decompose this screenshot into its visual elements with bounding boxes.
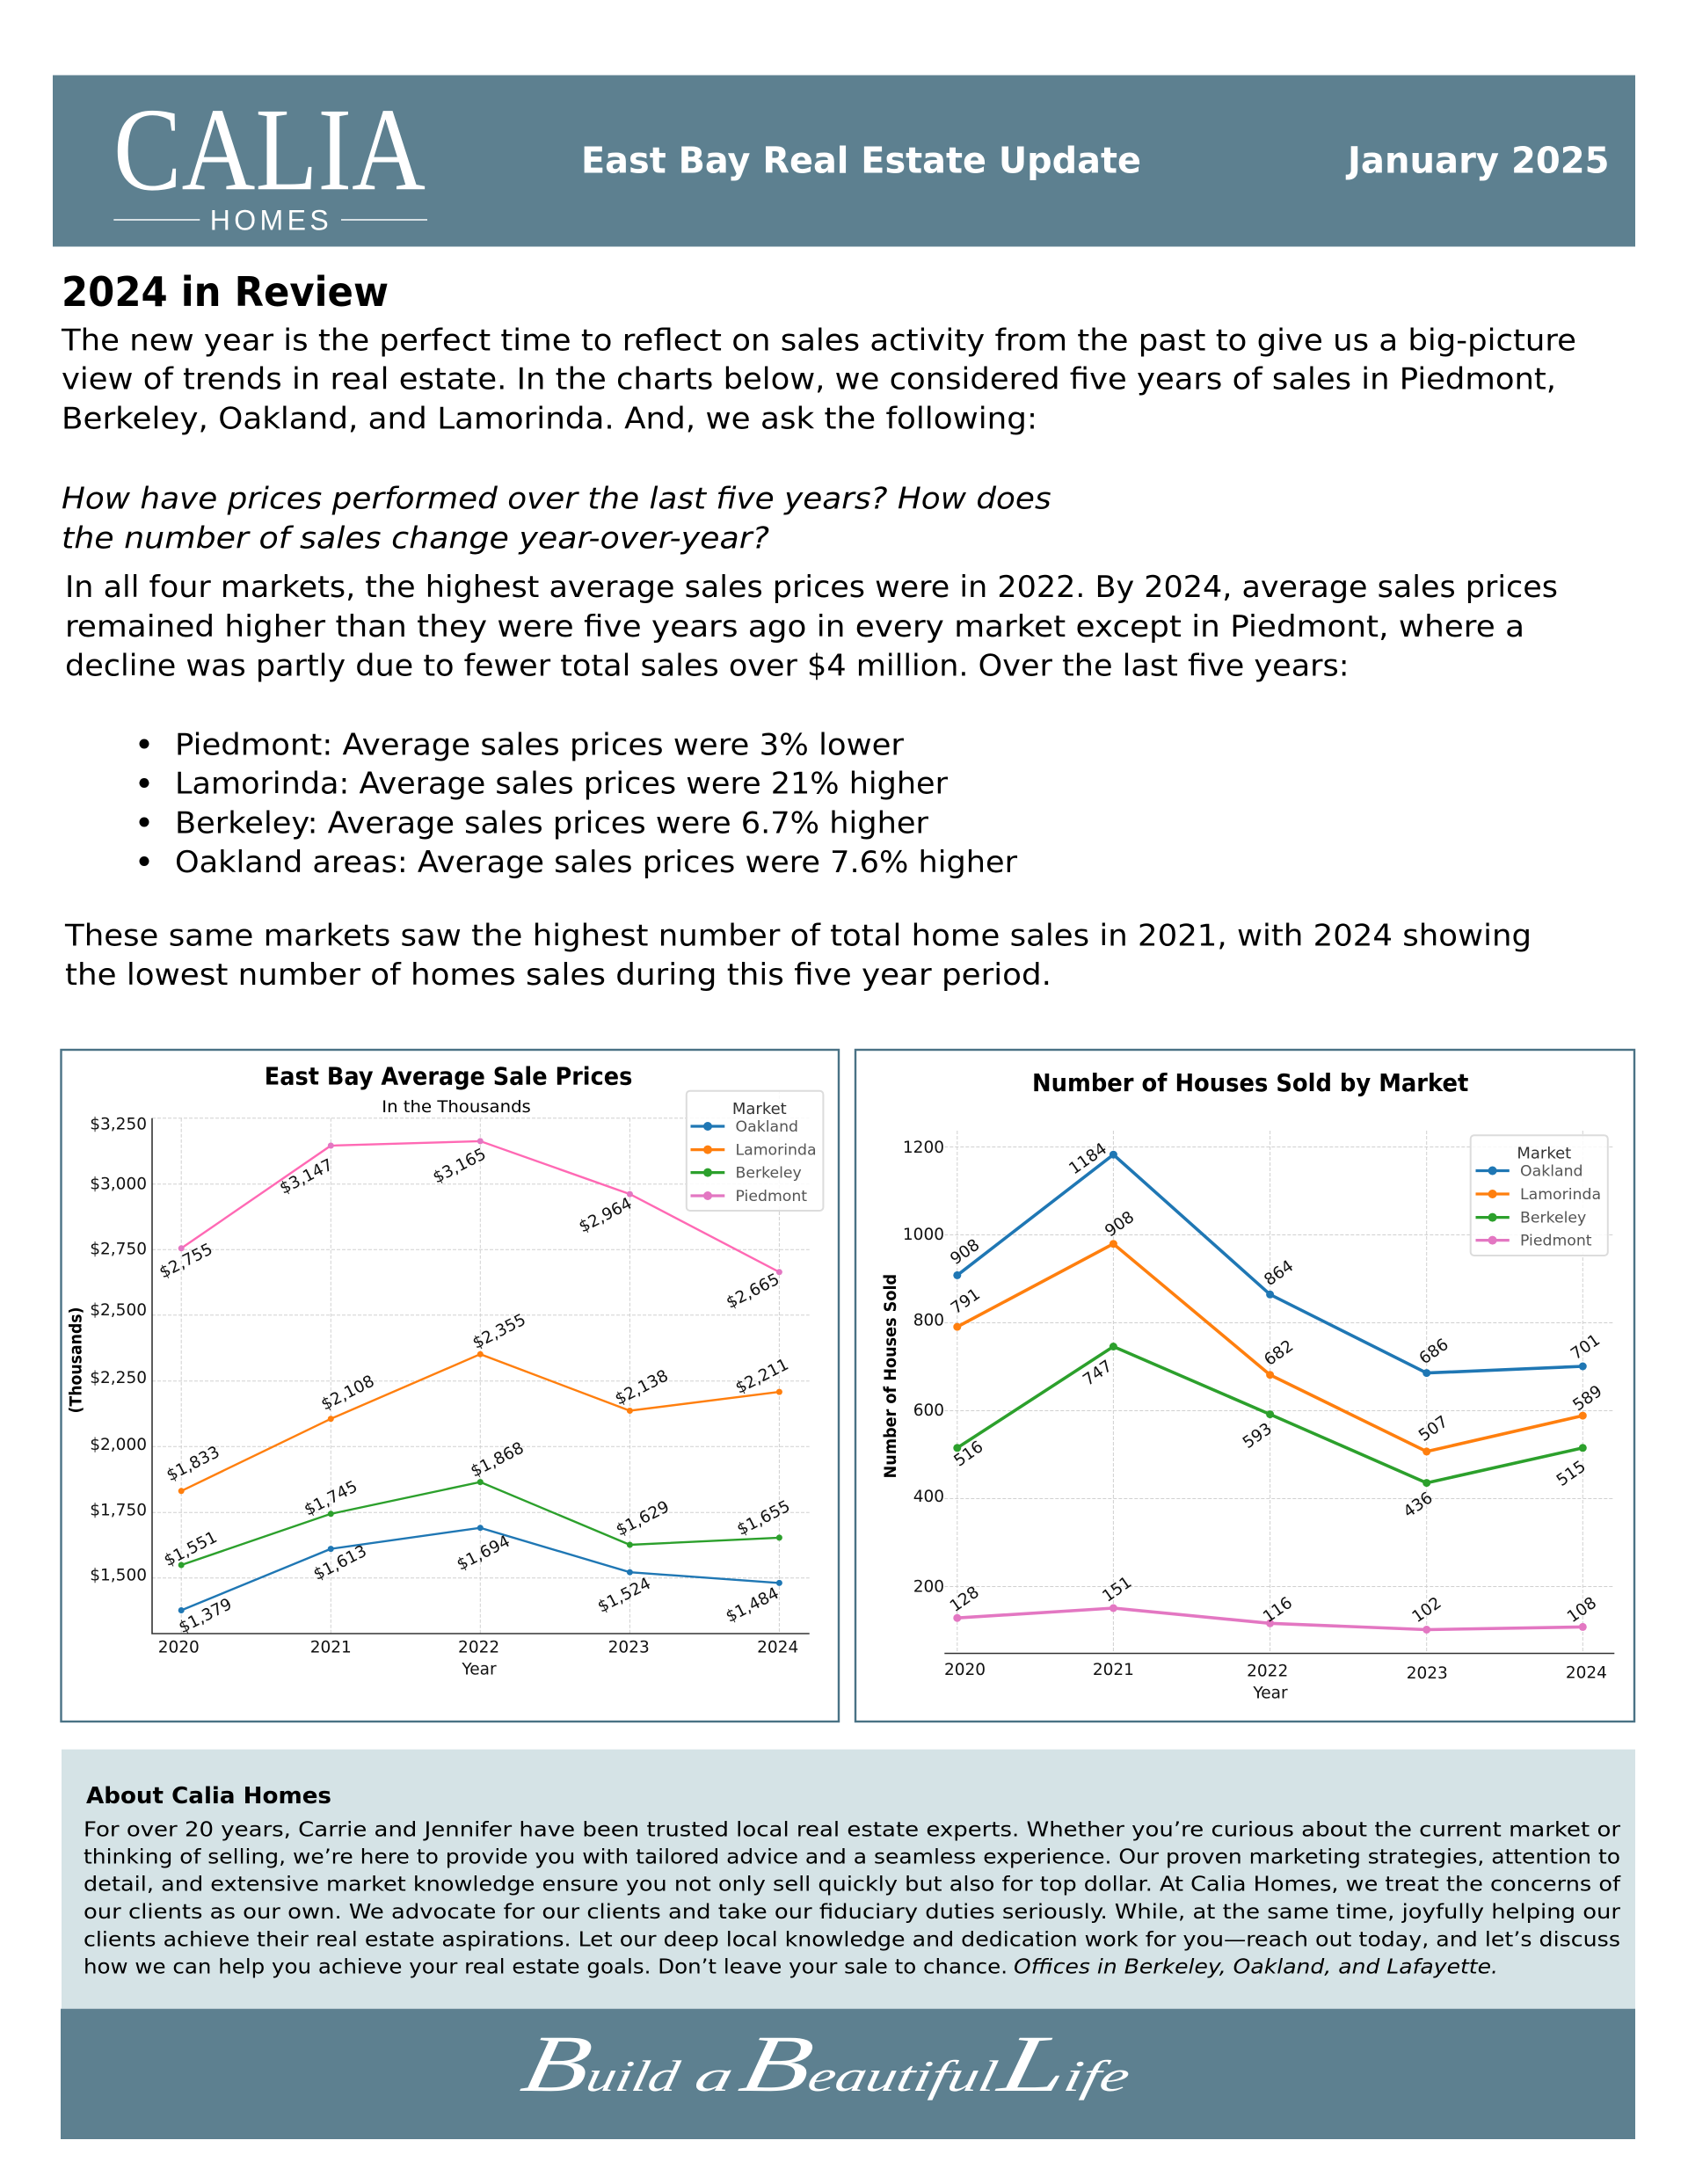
y axis tick labels: 1200 xyxy=(903,1139,944,1157)
banner title: East Bay Real Estate Update xyxy=(581,140,1141,182)
data labels: prices: $1,745 xyxy=(302,1477,360,1519)
x axis tick labels: 2020 xyxy=(944,1661,986,1679)
y axis tick labels xyxy=(90,1115,147,1584)
data labels: prices: $2,211 xyxy=(732,1356,792,1398)
intro paragraph: The new year is the perfect time to reflect on sales activity from the past to give us a big-picture xyxy=(61,323,1576,357)
about body text: Offices in Berkeley, Oakland, and Lafayette. xyxy=(1014,1955,1498,1979)
about body text: detail, and extensive market knowledge ensure you not only sell quickly but also for top dollar. At Calia Homes, we treat the concerns of xyxy=(84,1872,1621,1896)
panel: Number of Houses Sold by Market chart xyxy=(855,1050,1634,1722)
legend: market: Oakland xyxy=(1520,1162,1583,1180)
intro paragraph xyxy=(61,323,1576,435)
x axis tick labels xyxy=(944,1661,1607,1683)
about heading: About Calia Homes xyxy=(86,1783,331,1809)
legend: market: Berkeley xyxy=(735,1165,802,1183)
closing paragraph: the lowest number of homes sales during this five year period. xyxy=(65,957,1051,992)
data labels: prices: $2,355 xyxy=(469,1311,529,1353)
heading: 2024 in Review: 2024 in Review xyxy=(62,268,389,316)
panel: East Bay Average Sale Prices chart xyxy=(62,1050,839,1722)
italic questions xyxy=(62,482,1051,555)
y axis tick labels: 600 xyxy=(913,1401,944,1420)
footer banner xyxy=(61,2009,1635,2139)
about body text: For over 20 years, Carrie and Jennifer have been trusted local real estate experts. Whether you’re curious about the current market or xyxy=(84,1816,1620,1841)
tagline: Build a Beautiful Life: Life xyxy=(990,2020,1141,2109)
x axis tick labels: 2021 xyxy=(1093,1661,1134,1679)
italic questions: How have prices performed over the last five years? How does xyxy=(62,482,1051,516)
header banner xyxy=(53,76,1635,246)
data labels: prices: $2,964 xyxy=(576,1194,635,1236)
data labels: houses sold: 436 xyxy=(1401,1489,1437,1522)
data labels: prices: $1,868 xyxy=(468,1438,527,1481)
about body text xyxy=(84,1816,1621,1979)
x axis title: Year xyxy=(461,1660,497,1679)
y axis tick labels: $2,250 xyxy=(90,1369,147,1387)
data labels: houses sold: 108 xyxy=(1564,1594,1600,1627)
legend: market: Lamorinda xyxy=(735,1142,817,1160)
series: Lamorinda sales xyxy=(953,1240,1587,1455)
legend: market: Piedmont xyxy=(1520,1233,1592,1250)
bullet list: Berkeley: Average sales prices were 6.7% higher xyxy=(175,805,928,840)
y axis tick labels: $3,000 xyxy=(90,1175,147,1194)
bullet list: Lamorinda: Average sales prices were 21% higher xyxy=(175,767,948,801)
x axis tick labels xyxy=(158,1639,798,1656)
data labels: prices: $1,484 xyxy=(723,1584,782,1627)
data labels: houses sold: 747 xyxy=(1080,1357,1116,1390)
data labels: houses sold: 515 xyxy=(1553,1458,1590,1490)
about body text: thinking of selling, we’re here to provide you with tailored advice and a seamless experience. Our proven marketing strategies, attention to xyxy=(84,1844,1620,1868)
legend: market xyxy=(687,1091,823,1211)
chart title: Number of Houses Sold by Market xyxy=(1032,1068,1468,1097)
data labels: prices: $1,833 xyxy=(164,1443,222,1485)
series: Lamorinda prices xyxy=(178,1351,782,1494)
italic questions: the number of sales change year-over-year? xyxy=(62,521,769,555)
closing paragraph: These same markets saw the highest number of total home sales in 2021, with 2024 showing xyxy=(64,919,1532,953)
bullet list: Oakland areas: Average sales prices were 7.6% higher xyxy=(175,845,1017,879)
legend: market: Lamorinda xyxy=(1520,1186,1601,1204)
data labels: prices: $1,551 xyxy=(161,1528,221,1570)
series: Berkeley sales xyxy=(953,1343,1587,1487)
data labels: houses sold: 1184 xyxy=(1066,1139,1110,1178)
data labels: prices: $2,138 xyxy=(612,1366,672,1409)
series: Oakland prices xyxy=(178,1525,782,1613)
data labels: prices: $1,694 xyxy=(454,1532,513,1575)
data labels: prices: $3,165 xyxy=(430,1145,489,1187)
series: Berkeley prices xyxy=(178,1479,782,1569)
y axis tick labels: 400 xyxy=(913,1488,944,1506)
findings paragraph: decline was partly due to fewer total sales over $4 million. Over the last five years: xyxy=(65,649,1350,683)
banner date: January 2025 xyxy=(1345,140,1609,182)
bullet list: Piedmont: Average sales prices were 3% lower xyxy=(175,727,904,761)
series: Oakland sales xyxy=(953,1151,1587,1377)
data labels: houses sold: 682 xyxy=(1261,1336,1297,1370)
data labels: houses sold: 908 xyxy=(1102,1208,1138,1241)
closing paragraph xyxy=(64,919,1532,992)
y axis tick labels: $2,750 xyxy=(90,1240,147,1259)
about body text: our clients as our own. We advocate for our clients and take our fiduciary duties seriously. While, at the same time, joyfully helping our xyxy=(84,1899,1620,1924)
x axis tick labels: 2024 xyxy=(1566,1663,1607,1683)
x axis tick labels: 2024 xyxy=(757,1639,798,1656)
data labels: prices: $3,147 xyxy=(277,1156,336,1198)
legend: market xyxy=(1471,1135,1608,1256)
x axis tick labels: 2020 xyxy=(158,1639,200,1656)
y axis tick labels: $2,000 xyxy=(90,1436,147,1454)
data labels: houses sold: 128 xyxy=(947,1583,983,1616)
y axis tick labels: 1000 xyxy=(903,1226,944,1244)
x axis tick labels: 2023 xyxy=(608,1639,650,1656)
x axis tick labels: 2023 xyxy=(1407,1664,1448,1683)
data labels: prices: $1,655 xyxy=(734,1497,793,1540)
data labels: houses sold: 864 xyxy=(1261,1257,1297,1290)
y axis tick labels: 200 xyxy=(913,1577,944,1597)
x axis tick labels: 2021 xyxy=(310,1639,352,1656)
tagline: Build a Beautiful Life xyxy=(515,2020,1141,2109)
intro paragraph: view of trends in real estate. In the charts below, we considered five years of sales in Piedmont, xyxy=(62,362,1556,397)
series: Piedmont sales xyxy=(953,1604,1587,1634)
y axis tick labels: $1,500 xyxy=(90,1567,147,1584)
legend: market: Oakland xyxy=(735,1118,798,1136)
data labels: houses sold: 593 xyxy=(1240,1420,1276,1452)
findings paragraph xyxy=(65,570,1558,683)
logo: Calia Homes: CALIA xyxy=(113,84,426,215)
intro paragraph: Berkeley, Oakland, and Lamorinda. And, we ask the following: xyxy=(62,401,1037,435)
data labels: houses sold: 516 xyxy=(950,1438,986,1471)
y axis tick labels: $1,750 xyxy=(90,1502,147,1519)
findings paragraph: In all four markets, the highest average sales prices were in 2022. By 2024, average sales prices xyxy=(65,570,1558,604)
data labels: houses sold: 686 xyxy=(1416,1336,1452,1368)
data labels: prices xyxy=(156,1145,793,1637)
y axis tick labels xyxy=(903,1139,944,1597)
data labels: prices: $1,613 xyxy=(310,1542,370,1584)
about body text: how we can help you achieve your real estate goals. Don’t leave your sale to chance. xyxy=(84,1955,1008,1979)
data labels: houses sold: 701 xyxy=(1568,1331,1604,1364)
series: Piedmont prices xyxy=(178,1138,782,1275)
x axis tick labels: 2022 xyxy=(458,1639,499,1656)
data labels: houses sold: 791 xyxy=(948,1285,984,1318)
legend: market: Piedmont xyxy=(735,1188,807,1205)
x axis tick labels: 2022 xyxy=(1247,1662,1288,1681)
data labels: prices: $2,755 xyxy=(156,1240,215,1282)
y axis tick labels: 800 xyxy=(913,1312,944,1329)
tagline: Build a Beautiful Life: Beautiful xyxy=(733,2020,1008,2109)
data labels: prices: $1,524 xyxy=(595,1575,654,1617)
chart subtitle: In the Thousands xyxy=(382,1097,531,1117)
logo: Calia Homes: HOMES xyxy=(210,204,329,236)
panel: About Calia Homes xyxy=(62,1750,1635,2009)
legend: market: Market xyxy=(732,1100,787,1118)
y axis title: Number of Houses Sold xyxy=(882,1274,900,1479)
tagline: Build a Beautiful Life: Build xyxy=(515,2020,691,2109)
y axis title: (Thousands) xyxy=(67,1307,86,1414)
tagline: Build a Beautiful Life: a xyxy=(691,2051,738,2100)
data labels: prices: $1,629 xyxy=(614,1497,673,1540)
data labels: houses sold: 151 xyxy=(1099,1573,1135,1606)
x axis title: Year xyxy=(1252,1685,1288,1702)
data labels: houses sold: 507 xyxy=(1415,1413,1452,1445)
about body text: clients achieve their real estate aspirations. Let our deep local knowledge and dedication work for you—reach out today, and let’s discuss xyxy=(84,1926,1620,1951)
data labels: houses sold: 589 xyxy=(1569,1382,1605,1415)
data labels: houses sold: 102 xyxy=(1409,1594,1445,1627)
data labels: houses sold: 908 xyxy=(947,1236,983,1269)
data labels: houses sold: 116 xyxy=(1260,1594,1296,1627)
data labels: prices: $2,108 xyxy=(318,1372,377,1415)
data labels: houses sold xyxy=(947,1139,1605,1627)
data labels: prices: $1,379 xyxy=(176,1595,235,1637)
legend: market: Market xyxy=(1517,1145,1571,1162)
y axis tick labels: $3,250 xyxy=(90,1115,147,1134)
legend: market: Berkeley xyxy=(1520,1210,1586,1227)
findings paragraph: remained higher than they were five years ago in every market except in Piedmont, where a xyxy=(65,609,1524,644)
bullet list xyxy=(139,727,1017,879)
data labels: prices: $2,665 xyxy=(724,1270,782,1313)
chart title: East Bay Average Sale Prices xyxy=(265,1062,632,1091)
y axis tick labels: $2,500 xyxy=(90,1301,147,1320)
